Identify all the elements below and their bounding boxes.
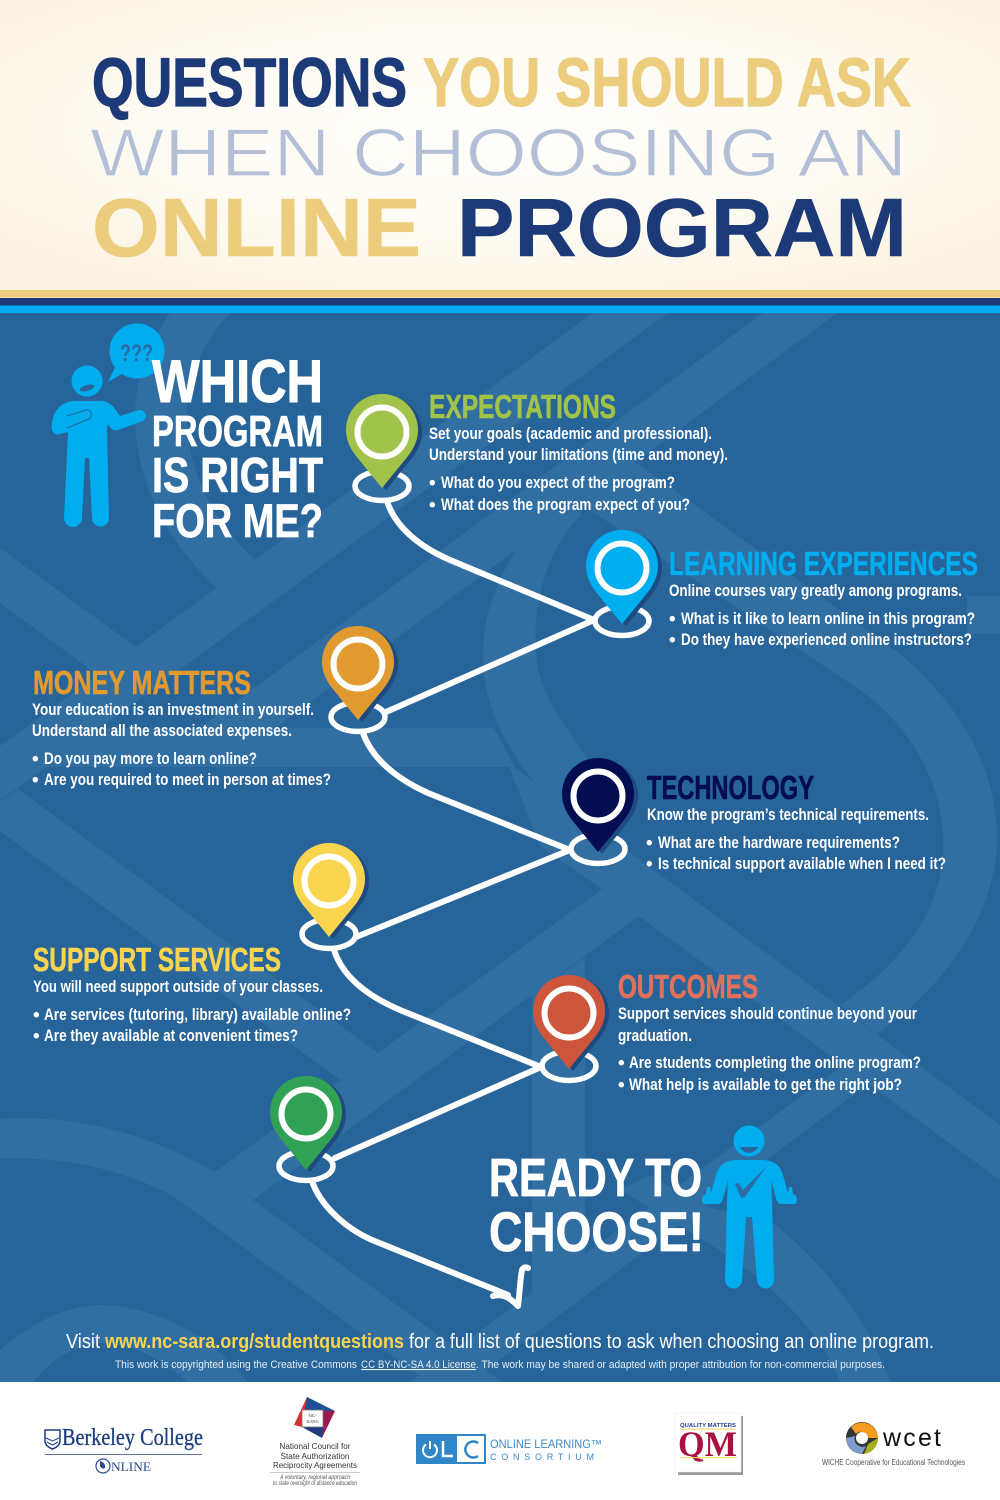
call to action line: Visit: [66, 1331, 100, 1353]
call to action line: for a full list of questions to ask when choosing an online program.: [409, 1331, 934, 1353]
text block: outcomes: graduation.: [618, 1027, 692, 1045]
text block: support services: Are they available at convenient times?: [44, 1027, 298, 1045]
header panel: [0, 0, 1000, 290]
text block: outcomes: Support services should continue beyond your: [618, 1005, 917, 1023]
logo: Online Learning Consortium: [416, 1434, 602, 1464]
title: WHEN CHOOSING AN: [90, 115, 907, 191]
logo: NC-SARA: [270, 1397, 360, 1487]
speech bubble: ???: [120, 340, 153, 367]
text block: money matters: [32, 664, 331, 791]
text block: money matters: •: [32, 749, 39, 770]
logo: WCET: wcet: [882, 1424, 941, 1452]
main blue panel: [0, 313, 1000, 1382]
heading: which program is right for me: [152, 348, 323, 547]
pin: outcomes: [533, 975, 609, 1080]
text block: support services: You will need support outside of your classes.: [33, 978, 323, 996]
text block: support services: [33, 941, 351, 1047]
logo: NC-SARA: National Council for: [280, 1441, 351, 1451]
logo: NC-SARA: to state oversight of distance education: [273, 1481, 358, 1487]
pin: final stop: [270, 1076, 346, 1180]
text block: technology: •: [646, 833, 653, 854]
title: [90, 44, 911, 274]
logo: Online Learning Consortium: ONLINE LEARNING™: [490, 1439, 602, 1451]
text block: expectations: •: [429, 495, 436, 516]
heading: ready to choose: [489, 1148, 704, 1263]
logo: NC-SARA: NC-: [308, 1413, 317, 1418]
title: PROGRAM: [457, 181, 907, 274]
text block: outcomes: What help is available to get the right job?: [629, 1076, 902, 1094]
text block: learning experiences: •: [669, 630, 676, 651]
copyright note: This work is copyrighted using the Creative Commons: [115, 1359, 357, 1371]
winding route line: [312, 501, 594, 1306]
title: QUESTIONS: [92, 44, 407, 121]
heading: which program is right for me: FOR ME?: [152, 494, 323, 547]
logo: Online Learning Consortium: CONSORTIUM: [490, 1452, 594, 1462]
logo: Quality Matters: QM: [678, 1424, 737, 1464]
pin: expectations: [346, 394, 422, 500]
call to action line: www.nc-sara.org/studentquestions: [104, 1331, 404, 1353]
logo: NC-SARA: State Authorization: [280, 1451, 350, 1461]
heading: ready to choose: READY TO: [489, 1148, 702, 1208]
text block: money matters: •: [32, 770, 39, 791]
text block: money matters: Understand all the associated expenses.: [32, 722, 292, 740]
text block: outcomes: OUTCOMES: [618, 968, 758, 1005]
text block: money matters: Are you required to meet in person at times?: [44, 771, 331, 789]
happy person with checkmark: [702, 1126, 797, 1288]
heading: ready to choose: CHOOSE!: [489, 1200, 704, 1263]
text block: expectations: What does the program expect of you?: [441, 496, 690, 514]
text block: outcomes: •: [618, 1075, 625, 1096]
text block: technology: What are the hardware requirements?: [658, 834, 900, 852]
heading: which program is right for me: PROGRAM: [152, 407, 323, 456]
logo: Berkeley College Online: Berkeley College: [62, 1425, 203, 1451]
text block: technology: [646, 769, 946, 875]
logo: NC-SARA: SARA: [306, 1419, 319, 1424]
text block: outcomes: •: [618, 1053, 625, 1074]
logo: Quality Matters: [675, 1413, 743, 1475]
speech bubble: [108, 324, 164, 382]
text block: technology: TECHNOLOGY: [647, 769, 814, 806]
person asking questions: [52, 324, 164, 527]
logo: Berkeley College Online: [45, 1425, 203, 1474]
text block: expectations: EXPECTATIONS: [429, 388, 616, 425]
pin: money matters: [322, 626, 398, 732]
text block: outcomes: Are students completing the online program?: [629, 1054, 921, 1072]
logo: NC-SARA: Reciprocity Agreements: [273, 1460, 357, 1470]
footer logo strip: [0, 1382, 1000, 1500]
text block: money matters: MONEY MATTERS: [33, 664, 251, 701]
text block: expectations: What do you expect of the program?: [441, 474, 675, 492]
logo: NC-SARA: A voluntary, regional approach: [279, 1475, 351, 1481]
text block: learning experiences: •: [669, 609, 676, 630]
pin: learning experiences: [586, 530, 662, 636]
copyright note: CC BY-NC-SA 4.0 License: [361, 1359, 476, 1371]
title: ONLINE: [92, 181, 421, 274]
text block: support services: •: [33, 1026, 40, 1047]
logo: Quality Matters: QUALITY MATTERS: [680, 1423, 736, 1429]
text block: expectations: [429, 388, 728, 516]
text block: money matters: Your education is an investment in yourself.: [32, 701, 314, 719]
heading: which program is right for me: IS RIGHT: [152, 449, 323, 503]
text block: learning experiences: [669, 545, 978, 651]
heading: which program is right for me: WHICH: [152, 348, 323, 415]
logo: WCET: [822, 1422, 965, 1467]
logo: Berkeley College Online: NLINE: [111, 1459, 151, 1474]
text block: outcomes: [618, 968, 921, 1096]
text block: support services: Are services (tutoring, library) available online?: [44, 1006, 351, 1024]
pin: support services: [293, 843, 369, 948]
text block: money matters: Do you pay more to learn online?: [44, 750, 257, 768]
call to action line: [66, 1331, 934, 1353]
text block: expectations: Understand your limitations (time and money).: [429, 446, 728, 464]
text block: technology: Know the program’s technical requirements.: [647, 806, 929, 824]
copyright note: [115, 1359, 885, 1371]
text block: support services: •: [33, 1005, 40, 1026]
text block: expectations: Set your goals (academic and professional).: [429, 425, 712, 443]
pin: technology: [562, 758, 638, 864]
text block: support services: SUPPORT SERVICES: [33, 941, 281, 978]
text block: technology: •: [646, 854, 653, 875]
text block: expectations: •: [429, 473, 436, 494]
copyright note: . The work may be shared or adapted with proper attribution for non-commercial purposes.: [476, 1359, 885, 1371]
